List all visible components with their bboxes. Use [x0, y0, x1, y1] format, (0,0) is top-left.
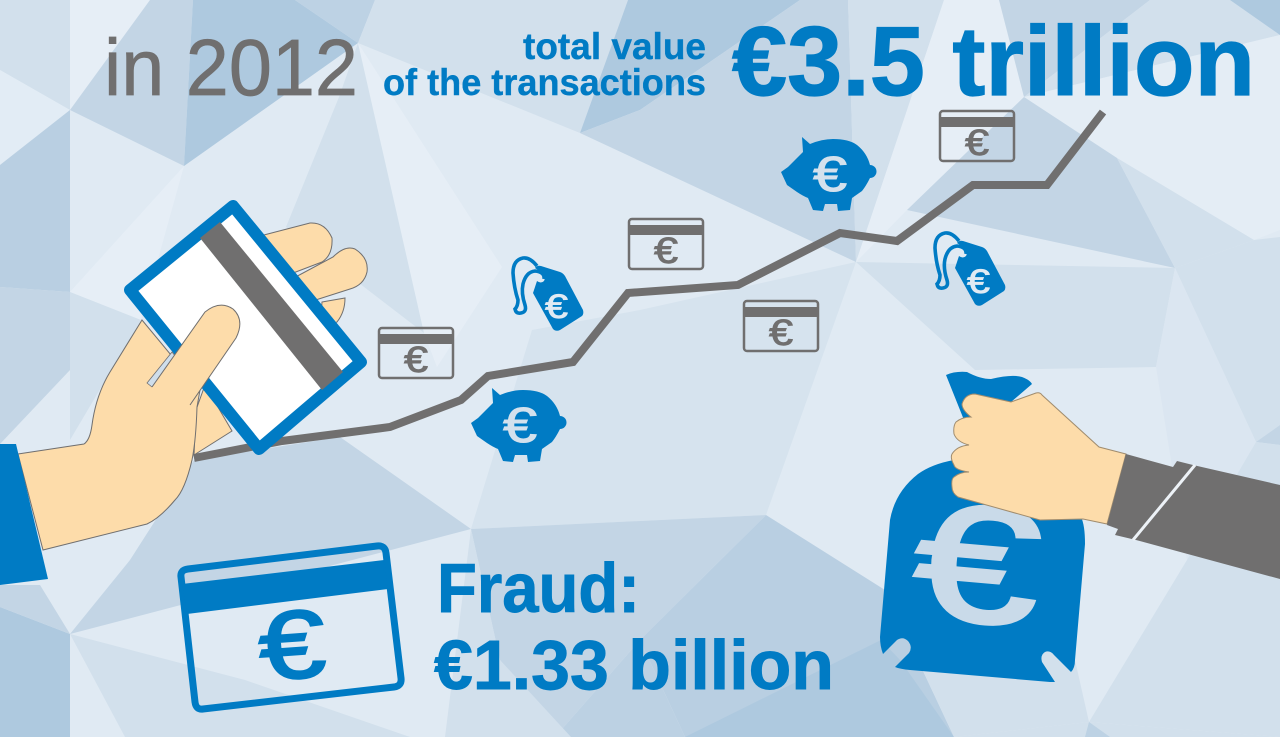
hand gripping bag [951, 393, 1126, 524]
icon: large fraud card [181, 546, 401, 709]
sleeve [0, 444, 48, 585]
magnetic stripe [200, 222, 343, 390]
icon: piggy bank bottom: € [503, 399, 537, 453]
icon: price tag right: € [967, 263, 990, 301]
label: Fraud amount: €1.33 billion [434, 626, 834, 704]
euro on bag: € [907, 467, 1047, 661]
icon: large fraud card: € [255, 590, 329, 701]
icon: price tag left [513, 258, 583, 331]
heading: total value of the transactions [383, 26, 706, 103]
suit sleeve [1107, 454, 1280, 579]
icon: piggy bank top [781, 137, 876, 211]
bank card [130, 206, 361, 449]
bag [880, 372, 1085, 682]
icon: card 2 [629, 219, 703, 271]
fingers and palm behind card [18, 223, 367, 550]
label: Fraud amount [434, 549, 834, 704]
icon: card 3 [744, 301, 818, 353]
icon: card 2: € [654, 230, 678, 271]
icon: card 4 [940, 111, 1014, 163]
big number: €3.5 trillion: €3.5 trillion [732, 6, 1255, 116]
icon: piggy bank bottom [471, 388, 566, 462]
shirt cuff line [1133, 465, 1195, 540]
illustration: left hand holding card [0, 206, 367, 585]
illustration: money bag with hand [880, 372, 1280, 682]
line chart: growth trend [194, 112, 1103, 458]
icon: price tag left: € [545, 288, 568, 326]
thumb [140, 305, 240, 425]
icon: price tag right [935, 233, 1005, 306]
icon: card 3: € [769, 312, 793, 353]
icon: card 1: € [404, 339, 428, 380]
heading: total value of the transactions: of the transactions [383, 62, 706, 103]
heading: total value of the transactions: total value [523, 26, 706, 67]
icon: piggy bank top: € [813, 148, 847, 202]
icon: card 1 [379, 328, 453, 380]
sliver between palm and thumb [147, 352, 176, 387]
heading: in 2012: in 2012 [104, 23, 358, 112]
label: Fraud amount: Fraud: [437, 549, 640, 627]
icon: card 4: € [965, 122, 989, 163]
